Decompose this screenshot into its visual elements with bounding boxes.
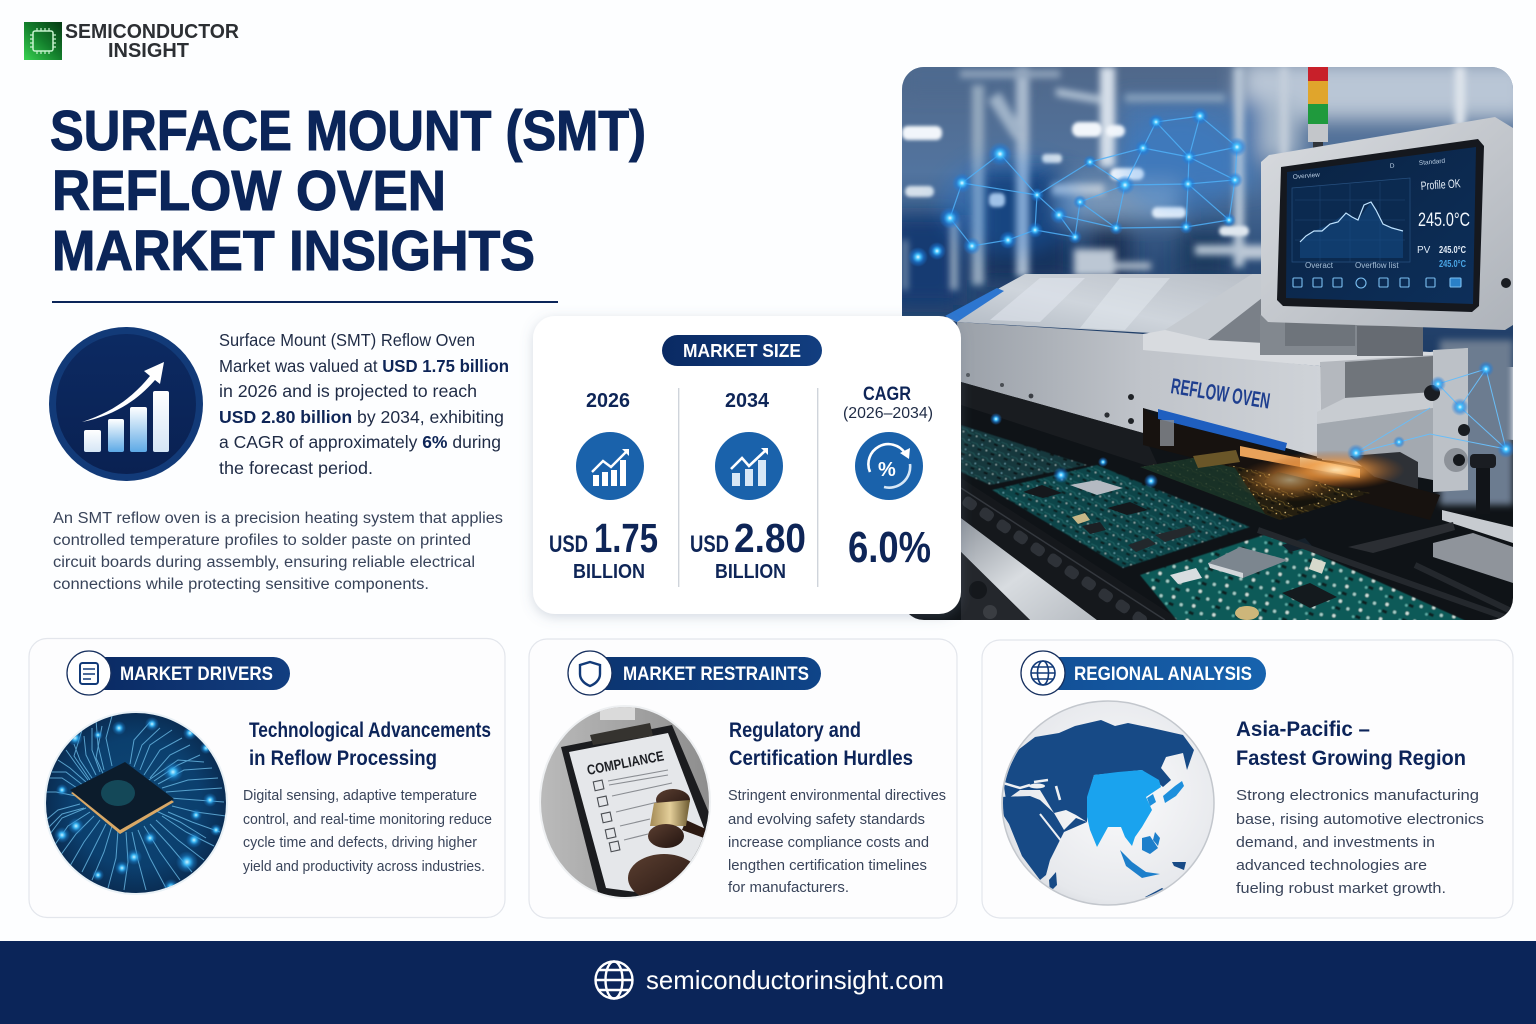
clipboard clip: [590, 723, 653, 745]
intro paragraph: a CAGR of approximately 6% during: [219, 432, 501, 452]
column: 2026: 2026: [586, 390, 630, 412]
lower conveyor base: [902, 375, 1513, 620]
heading pill: market drivers: MARKET DRIVERS: [120, 663, 273, 685]
blurred factory background: [890, 60, 1530, 367]
column: CAGR: [843, 384, 933, 572]
regional body text: demand, and investments in: [1236, 834, 1435, 851]
driver body text: [243, 787, 492, 875]
circular image: compliance clipboard: [535, 700, 715, 902]
logo wordmark: INSIGHT: [108, 40, 189, 62]
logo: Semiconductor Insight: [24, 21, 240, 62]
panel: market drivers: [29, 638, 505, 918]
definition paragraph: connections while protecting sensitive components.: [53, 576, 429, 593]
monitor: Standard: [1419, 158, 1446, 167]
restraint body text: for manufacturers.: [728, 879, 849, 896]
icon: footer globe: [596, 962, 632, 998]
restraint heading: [729, 718, 913, 770]
gavel: [628, 789, 708, 902]
restraint body text: and evolving safety standards: [728, 811, 925, 828]
heat glow: [1240, 446, 1405, 490]
column: 2034: [690, 390, 806, 583]
screen chart: [1292, 178, 1410, 262]
panel: market restraints: [529, 639, 957, 918]
icon: percent cycle: %: [878, 459, 896, 481]
column: 2034: 2034: [725, 390, 770, 412]
lower right rollers: [1258, 530, 1513, 620]
driver body text: cycle time and defects, driving higher: [243, 834, 477, 851]
oven centre top band: [1143, 330, 1468, 366]
map globe: Asia-Pacific highlighted: [1000, 701, 1214, 905]
restraint heading: Certification Hurdles: [729, 746, 913, 770]
silver rail lower left: [961, 518, 1097, 620]
heading pill: market restraints: MARKET RESTRAINTS: [623, 663, 809, 685]
icon: green chip: [24, 22, 62, 60]
definition paragraph: controlled temperature profiles to solder paste on printed: [53, 532, 471, 549]
column: 2034: USD: [690, 531, 729, 558]
oven label: REFLOW OVEN: [1169, 373, 1272, 414]
stack light: [1308, 67, 1328, 152]
intro paragraph: [219, 330, 509, 478]
definition paragraph: [53, 510, 503, 593]
heading pill: regional analysis: REGIONAL ANALYSIS: [1074, 663, 1252, 685]
column: CAGR: (2026–2034): [843, 405, 933, 422]
PCB front: [1140, 533, 1473, 624]
checklist: [593, 770, 672, 852]
icon: document: [67, 651, 111, 695]
definition paragraph: An SMT reflow oven is a precision heating system that applies: [53, 510, 503, 527]
heading pill: regional analysis: [1043, 657, 1266, 690]
water gaps: [1003, 780, 1048, 788]
oven front face: [1143, 350, 1322, 458]
column: 2026: BILLION: [573, 561, 645, 583]
column: 2026: USD: [549, 531, 588, 558]
driver heading: [249, 718, 491, 770]
logo wordmark: [65, 21, 240, 62]
monitor: D: [1390, 163, 1395, 170]
PCB far left: [961, 425, 1087, 485]
silver rear equipment: [1440, 340, 1513, 505]
title: SURFACE MOUNT (SMT): [50, 99, 646, 163]
screen readouts: Profile OK: [1420, 176, 1461, 193]
oven left side panel: [957, 322, 1143, 433]
screen readouts: 245.0°C: [1439, 245, 1466, 256]
regional body text: [1236, 787, 1484, 897]
monitor: Overflow list: [1355, 261, 1399, 270]
compliance text: COMPLIANCE: [586, 747, 665, 778]
icon: rising bars: [576, 432, 644, 500]
footer band: [0, 941, 1536, 1024]
column: 2026: [549, 390, 658, 583]
monitor: [1261, 117, 1513, 356]
dark opening: [1143, 408, 1440, 520]
intro paragraph: Market was valued at USD 1.75 billion: [219, 356, 509, 376]
regional body text: advanced technologies are: [1236, 857, 1427, 874]
icon: percent cycle: [855, 432, 923, 500]
circular image: microchip: [44, 711, 228, 895]
Middle East and Africa: [1000, 796, 1087, 880]
Asia-Pacific highlight: [1087, 770, 1161, 847]
title: [50, 99, 646, 283]
pill: market size heading: MARKET SIZE: [683, 340, 801, 361]
icon: growth chart badge: [49, 327, 203, 481]
Eurasia: [1003, 720, 1194, 822]
icon: shield: [568, 651, 612, 695]
definition paragraph: circuit boards during assembly, ensuring reliable electrical: [53, 554, 475, 571]
driver body text: yield and productivity across industries.: [243, 858, 485, 875]
rail under left panel: [961, 382, 1160, 470]
column: CAGR: 6.0%: [848, 523, 931, 572]
intro paragraph: the forecast period.: [219, 458, 373, 478]
regional body text: base, rising automotive electronics: [1236, 811, 1484, 828]
icon: globe: [1021, 651, 1065, 695]
blue lid edge: [945, 288, 1004, 322]
driver heading: in Reflow Processing: [249, 746, 437, 770]
network lower right: [990, 361, 1515, 488]
icon: rising bars and arrow: [715, 432, 783, 500]
conveyor rollers: [961, 488, 1166, 620]
screen readouts: [1417, 176, 1470, 270]
panel: market size: [533, 316, 961, 614]
title: MARKET INSIGHTS: [52, 219, 535, 283]
screen icon row: [1293, 278, 1461, 288]
screen readouts: 245.0°C: [1439, 259, 1466, 270]
regional heading: Fastest Growing Region: [1236, 746, 1466, 770]
column: 2026: 1.75: [594, 515, 658, 561]
restraint body text: lengthen certification timelines: [728, 857, 927, 874]
regional body text: Strong electronics manufacturing: [1236, 787, 1479, 804]
restraint heading: Regulatory and: [729, 718, 861, 742]
PCB glowing under heater: [1140, 450, 1370, 520]
column: 2034: 2.80: [734, 515, 806, 561]
restraint body text: increase compliance costs and: [728, 834, 929, 851]
photo: reflow oven on factory line: [890, 60, 1530, 627]
logo wordmark: SEMICONDUCTOR: [65, 21, 240, 43]
regional body text: fueling robust market growth.: [1236, 880, 1446, 897]
screen readouts: 245.0°C: [1418, 210, 1470, 231]
footer website: semiconductorinsight.com: [646, 965, 944, 995]
driver heading: Technological Advancements: [249, 718, 491, 742]
column: CAGR: CAGR: [863, 384, 911, 405]
monitor screen: [1277, 139, 1484, 312]
regional heading: [1236, 717, 1466, 770]
intro paragraph: USD 2.80 billion by 2034, exhibiting: [219, 407, 504, 427]
blue strip under label: [1158, 409, 1287, 451]
heading pill: market restraints: [590, 657, 821, 690]
screen top bar text: Overview: [1293, 172, 1320, 181]
Japan, Korea and islands: [1163, 781, 1184, 803]
intro paragraph: Surface Mount (SMT) Reflow Oven: [219, 330, 475, 350]
intro paragraph: in 2026 and is projected to reach: [219, 381, 477, 401]
heading pill: market drivers: [89, 657, 290, 690]
restraint body text: [728, 787, 946, 896]
right fixtures: [1348, 385, 1513, 583]
screen readouts: PV: [1417, 245, 1431, 256]
PCB centre: [992, 465, 1250, 568]
chip body: [71, 792, 174, 834]
regional heading: Asia-Pacific –: [1236, 717, 1370, 741]
screen status bar: Overact: [1305, 261, 1334, 270]
oven lid: [945, 274, 1262, 345]
panel: regional analysis: [982, 640, 1513, 918]
driver body text: Digital sensing, adaptive temperature: [243, 787, 477, 804]
restraint body text: Stringent environmental directives: [728, 787, 946, 804]
column: 2034: BILLION: [715, 561, 786, 583]
blue network overlay: [908, 107, 1247, 267]
title: REFLOW OVEN: [52, 159, 446, 223]
driver body text: control, and real-time monitoring reduce: [243, 811, 492, 828]
pill: market size heading: [662, 335, 822, 366]
